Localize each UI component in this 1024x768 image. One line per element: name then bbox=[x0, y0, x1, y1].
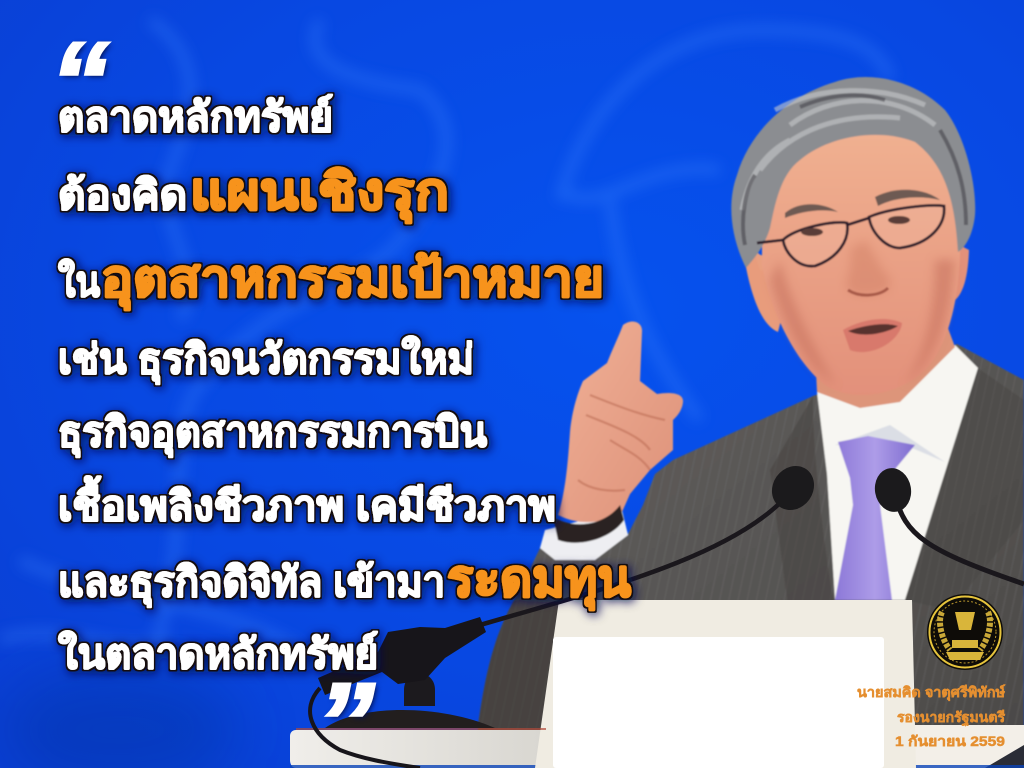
cheek shading bbox=[770, 260, 955, 385]
line 7: และธุรกิจดิจิทัล เข้ามา bbox=[58, 559, 445, 608]
suit jacket bbox=[478, 344, 1024, 768]
jacket lower shadow bbox=[478, 590, 560, 768]
ears bbox=[745, 250, 790, 332]
line 2 highlight: แผนเชิงรุก bbox=[190, 163, 449, 224]
head base under hair bbox=[750, 240, 955, 270]
line 7 highlight: ระดมทุน bbox=[447, 550, 631, 611]
seal: government emblem bbox=[927, 594, 1003, 670]
hair highlights bbox=[742, 91, 935, 210]
finger creases bbox=[578, 395, 665, 491]
mic base bbox=[325, 710, 495, 728]
caption: speaker name and date: รองนายกรัฐมนตรี bbox=[897, 709, 1005, 727]
photo: speaker pointing bbox=[478, 77, 1024, 768]
line 2: ต้องคิด bbox=[58, 172, 187, 218]
quote text bbox=[58, 94, 631, 677]
line 4: เช่น ธุรกิจนวัตกรรมใหม่ bbox=[58, 335, 474, 385]
wrist watch bbox=[553, 505, 624, 543]
eyebrows bbox=[785, 204, 838, 218]
face bbox=[762, 132, 960, 395]
mouth bbox=[843, 319, 902, 352]
grey hair bbox=[731, 77, 975, 268]
shirt cuff bbox=[540, 510, 628, 560]
nose bbox=[846, 240, 890, 295]
hair dark strands bbox=[743, 95, 966, 245]
pointing hand bbox=[558, 321, 683, 522]
line 8: ในตลาดหลักทรัพย์ bbox=[58, 630, 378, 677]
neck bbox=[815, 320, 955, 408]
caption: speaker name and date: 1 กันยายน 2559 bbox=[895, 733, 1005, 749]
line 5: ธุรกิจอุตสาหกรรมการบิน bbox=[58, 409, 487, 458]
line 1: ตลาดหลักทรัพย์ bbox=[58, 94, 333, 140]
collar shadow bbox=[835, 425, 945, 462]
mic cable bbox=[310, 688, 420, 768]
white shirt and collar bbox=[817, 345, 978, 600]
glasses bbox=[757, 205, 944, 266]
microphones bbox=[310, 458, 1024, 768]
line 3: ใน bbox=[58, 258, 100, 305]
caption: speaker name and date bbox=[857, 684, 1005, 749]
lectern bbox=[290, 600, 1024, 768]
eyes bbox=[801, 228, 823, 236]
lapel shade bbox=[770, 396, 835, 620]
purple tie bbox=[835, 436, 915, 600]
right mic bbox=[895, 495, 1024, 584]
line 3 highlight: อุตสาหกรรมเป้าหมาย bbox=[101, 250, 604, 311]
caption: speaker name and date: นายสมคิด จาตุศรีพิทักษ์ bbox=[857, 684, 1005, 701]
line 6: เชื้อเพลิงชีวภาพ เคมีชีวภาพ bbox=[58, 476, 556, 529]
left mic stem bbox=[480, 490, 792, 625]
mic shock mount bbox=[318, 617, 486, 695]
